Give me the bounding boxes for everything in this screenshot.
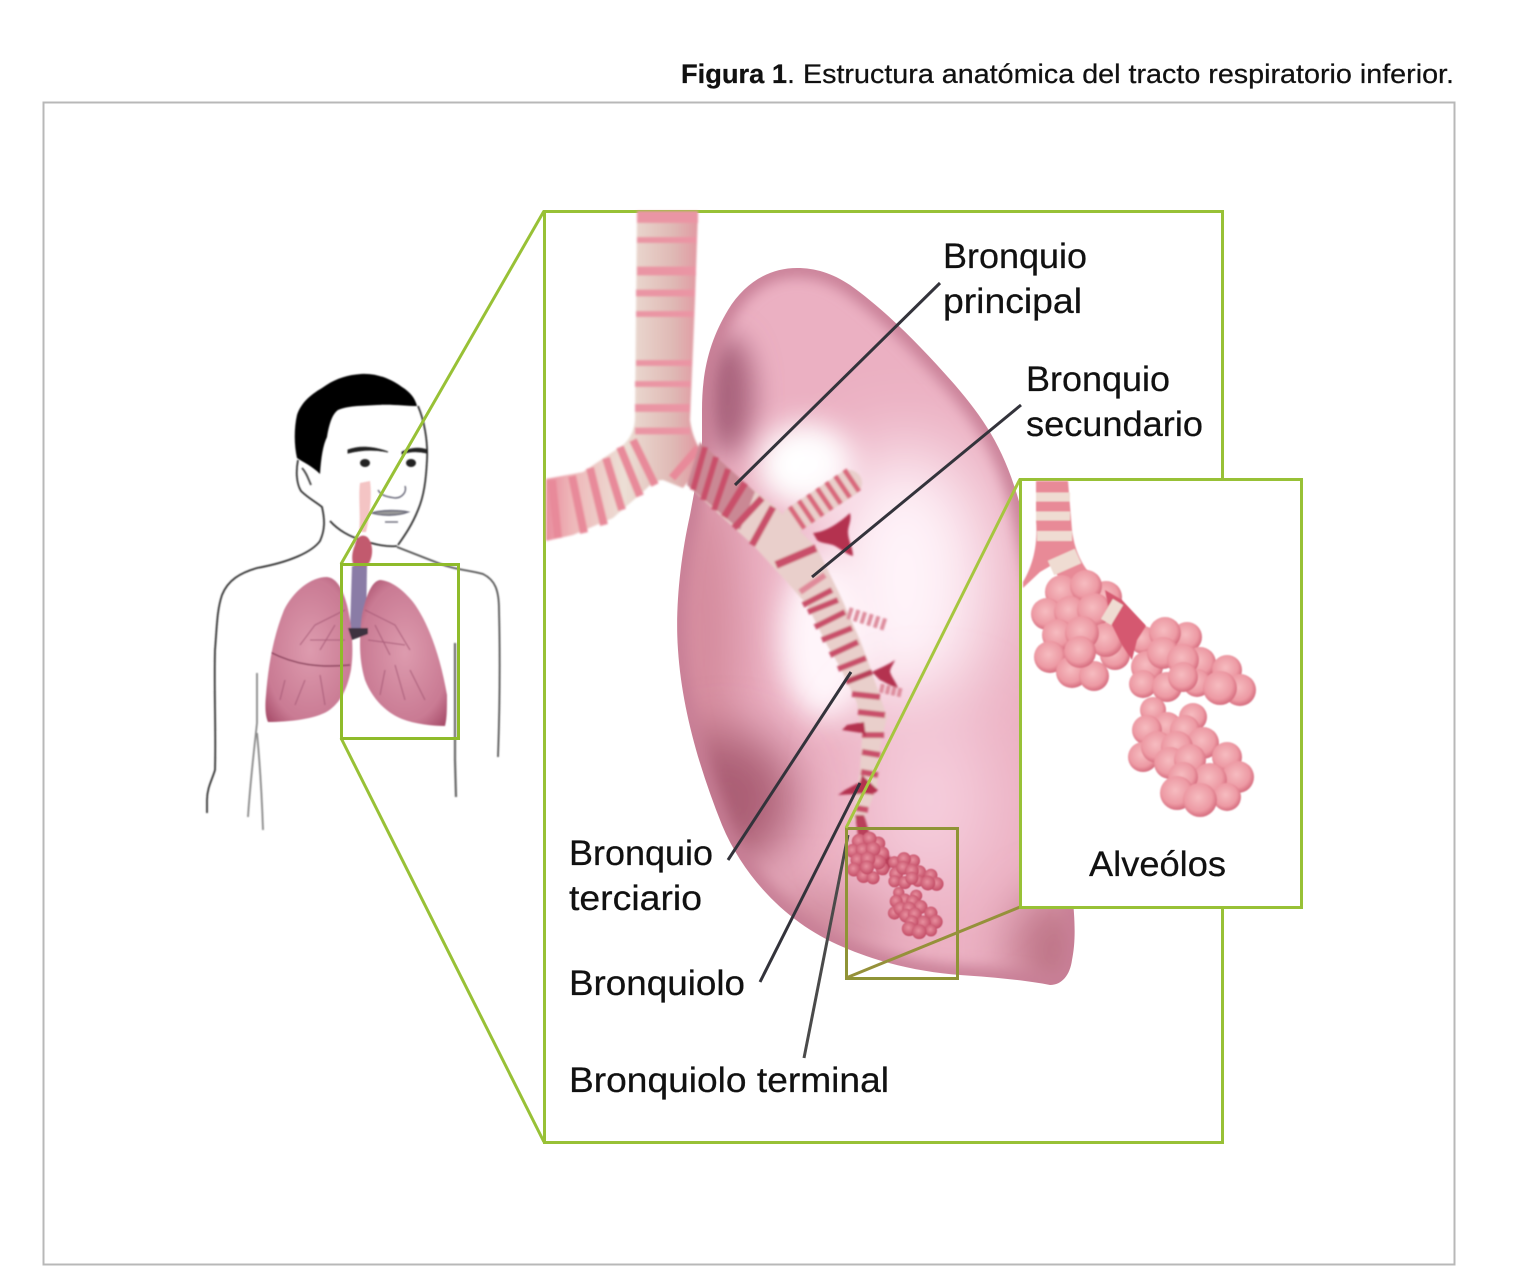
icon: nose and mouth	[372, 486, 408, 522]
airway rings	[1036, 497, 1078, 568]
secondary branch rings	[795, 477, 857, 519]
icon: hair	[295, 374, 417, 474]
dark branch stub	[813, 513, 853, 556]
label: Alveólos: Alveólos	[1089, 845, 1226, 884]
panel background	[544, 212, 1222, 1142]
large alveoli clusters	[1031, 570, 1256, 817]
small pale branch	[848, 613, 886, 625]
right main bronchus	[687, 442, 887, 822]
leader: bronquio terciario	[728, 672, 851, 860]
label: Bronquio secundario: Bronquio	[1026, 360, 1170, 399]
trachea and main bronchi	[546, 211, 902, 875]
connector lines: torso to lung panel	[341, 211, 544, 1142]
title: Figura 1	[681, 59, 787, 89]
terminal bronchiole	[855, 815, 895, 875]
label: Bronquiolo terminal: Bronquiolo terminal	[569, 1061, 889, 1100]
connector lines: lung to alveoli panel	[846, 479, 1020, 978]
icon: small right lung	[359, 579, 448, 727]
dark stub two	[872, 660, 898, 688]
inset background	[1020, 480, 1302, 908]
label: Bronquio secundario	[1026, 360, 1203, 444]
icon: nasal airway	[359, 481, 371, 532]
icon: larynx	[352, 536, 372, 566]
small alveoli clusters	[846, 832, 944, 939]
leader: bronquiolo terminal	[804, 835, 848, 1058]
label: Bronquio principal: principal	[943, 282, 1082, 321]
dark stub four	[838, 775, 878, 795]
terminal airway	[1023, 481, 1145, 665]
leader: bronquio principal	[735, 283, 940, 485]
leader: bronquio secundario	[812, 405, 1021, 577]
label: Bronquio terciario: Bronquio	[569, 834, 713, 873]
icon: eyebrows	[348, 447, 427, 454]
label: Bronquio principal	[943, 237, 1087, 321]
label: Bronquiolo: Bronquiolo	[569, 964, 745, 1003]
bronchiole joint with rings	[1105, 590, 1146, 660]
icon: small trachea	[350, 566, 367, 634]
icon: small left lung	[264, 576, 354, 723]
small pale branch two	[880, 688, 902, 693]
secondary branch	[795, 483, 849, 519]
dark stub three	[842, 722, 866, 737]
leader: bronquiolo	[760, 783, 860, 982]
label: Bronquio terciario: terciario	[569, 879, 702, 918]
lung body	[677, 268, 1075, 985]
left bronchus rings	[552, 440, 698, 538]
icon: bronchi junction	[348, 628, 368, 640]
label: Bronquio terciario	[569, 834, 713, 918]
icon: eyes	[360, 459, 416, 467]
label: Bronquio secundario: secundario	[1026, 405, 1203, 444]
small selection box on lung	[846, 828, 958, 978]
figure: human torso with lungs	[207, 374, 500, 830]
panel: enlarged lung	[544, 211, 1222, 1142]
trachea rings	[635, 217, 698, 431]
bronchus shading	[687, 442, 755, 530]
title: . Estructura anatómica del tracto respiratorio inferior.	[787, 59, 1454, 89]
panel: alveoli inset	[1020, 480, 1302, 908]
body outline	[207, 406, 500, 830]
trachea	[546, 211, 702, 541]
small selection box on torso	[342, 564, 458, 738]
bronchus rings	[693, 447, 885, 810]
label: Bronquio principal: Bronquio	[943, 237, 1087, 276]
